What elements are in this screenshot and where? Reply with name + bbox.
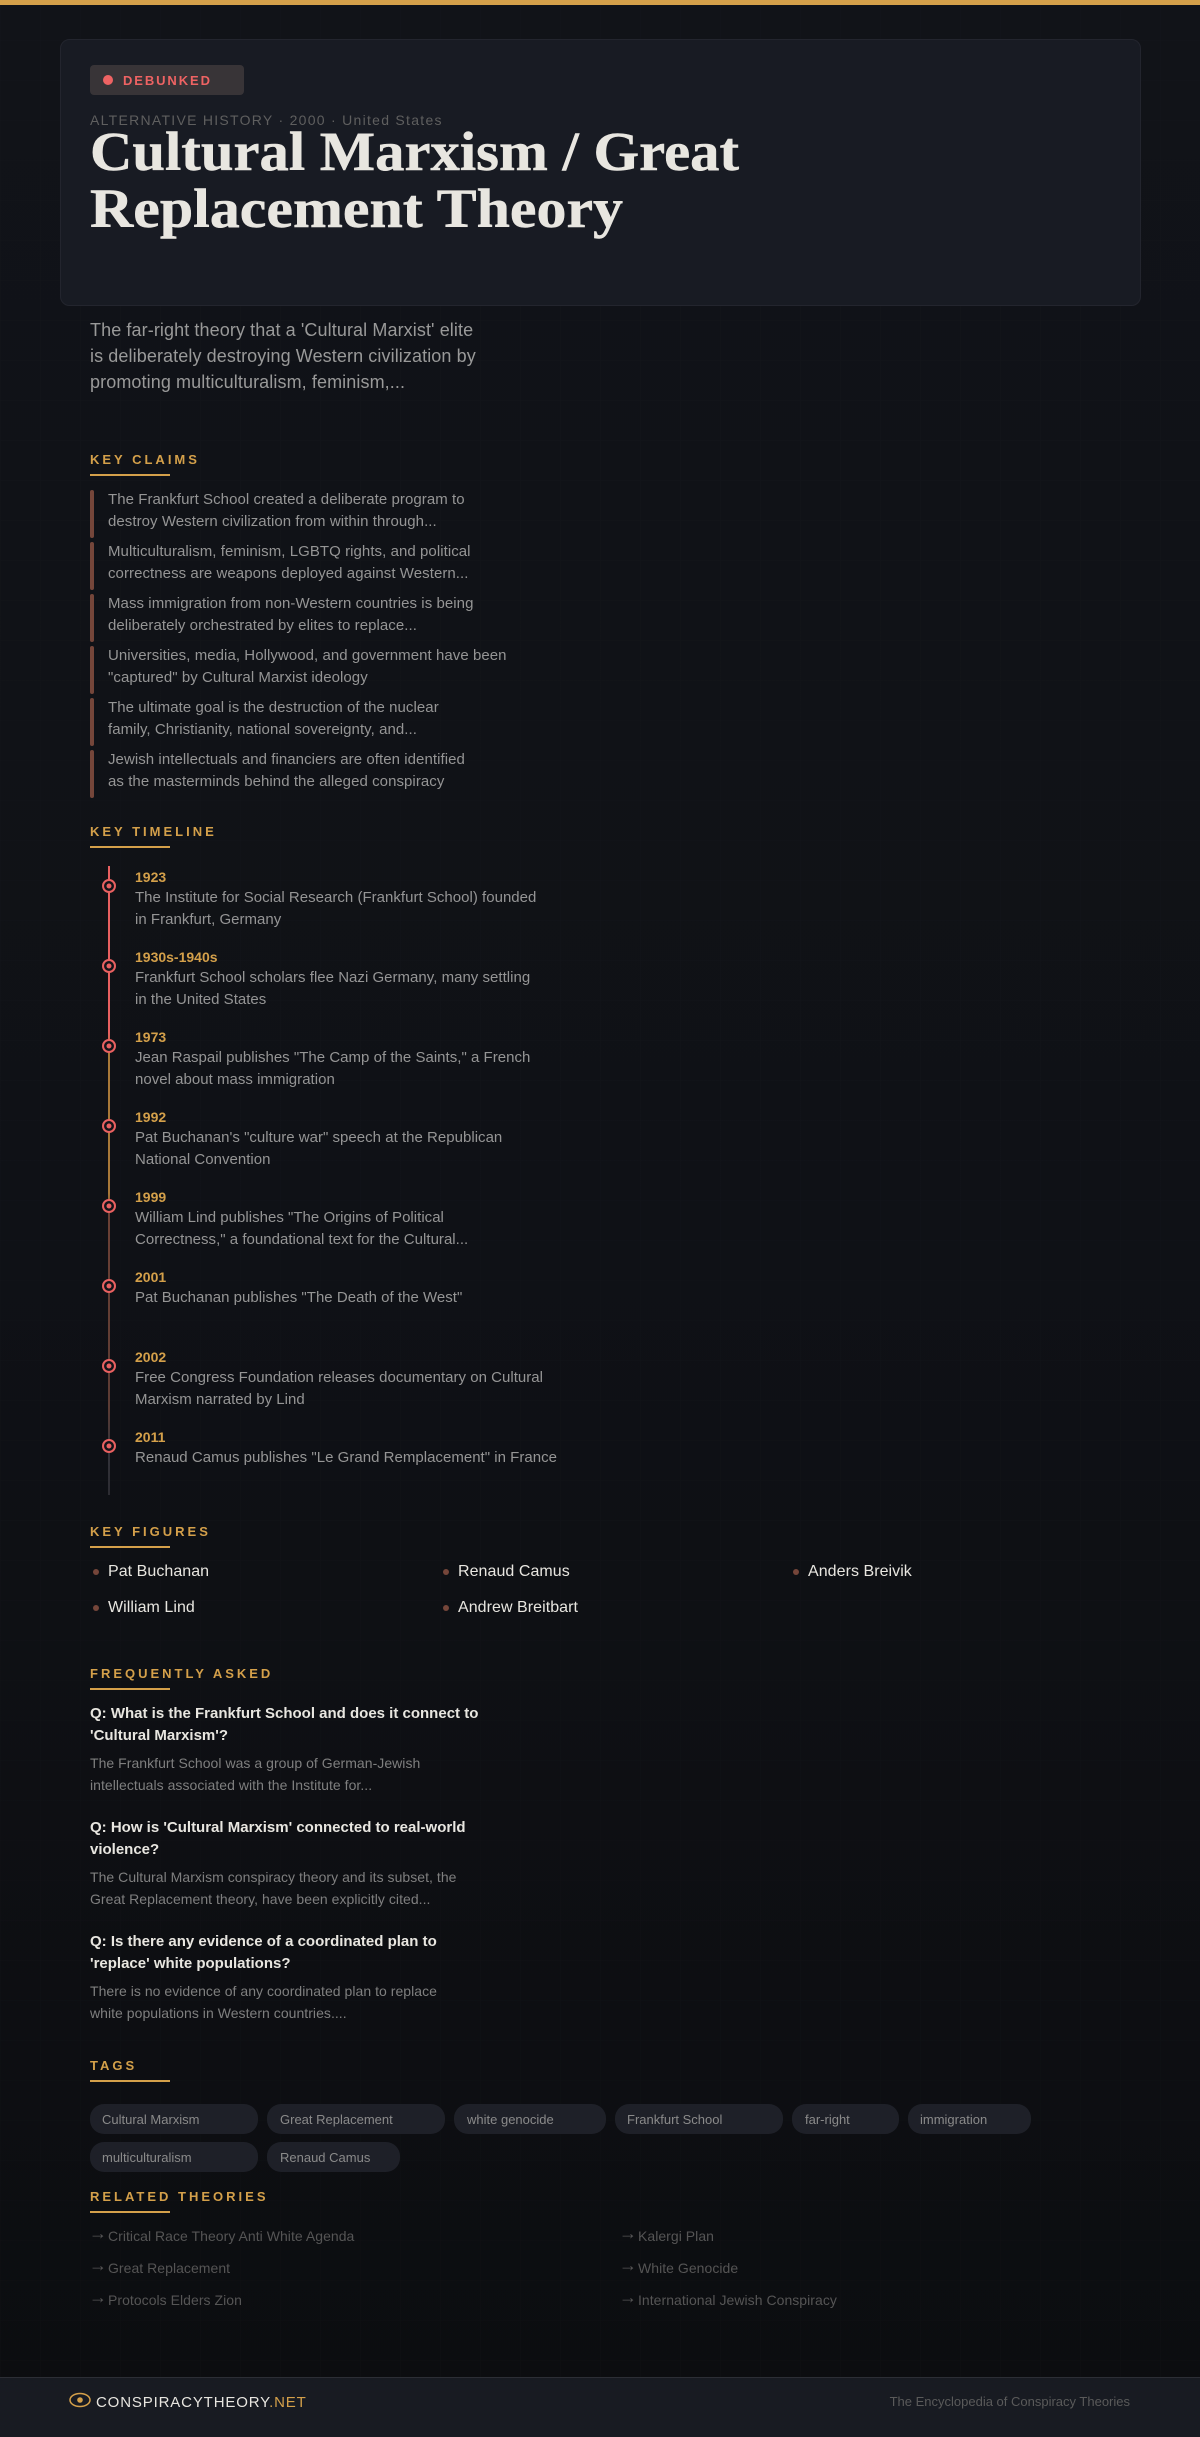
- claim 1: The Frankfurt School created a deliberate program to: [108, 491, 465, 508]
- tag: Great Replacement: Great Replacement: [280, 2112, 393, 2127]
- heading: key timeline: KEY TIMELINE: [90, 824, 217, 839]
- claim 5: [90, 698, 439, 746]
- event 1992: [103, 1109, 502, 1168]
- claim 6: [90, 750, 465, 798]
- link: International Jewish Conspiracy: →: [619, 2287, 642, 2307]
- faq 3: white populations in Western countries....: [89, 2005, 347, 2021]
- heading: key figures: KEY FIGURES: [90, 1524, 211, 1539]
- event 2001: Pat Buchanan publishes "The Death of the West": [135, 1289, 462, 1306]
- faq 2: [90, 1819, 466, 1907]
- event 1992: 1992: [135, 1109, 166, 1125]
- link: Critical Race Theory Anti White Agenda: Critical Race Theory Anti White Agenda: [108, 2228, 355, 2244]
- title: Cultural Marxism / Great: [90, 121, 740, 182]
- event 1973: 1973: [135, 1029, 166, 1045]
- claim 2: correctness are weapons deployed against Western...: [108, 565, 468, 582]
- tag: immigration: [908, 2104, 1031, 2134]
- figure: Andrew Breitbart: Andrew Breitbart: [458, 1599, 578, 1616]
- faq 2: Great Replacement theory, have been explicitly cited...: [90, 1891, 430, 1907]
- event 1999: 1999: [135, 1189, 166, 1205]
- tag: far-right: [792, 2104, 899, 2134]
- faq 1: [90, 1705, 478, 1793]
- event 2002: Marxism narrated by Lind: [135, 1391, 305, 1408]
- event 2002: [103, 1349, 543, 1408]
- faq 1: Q: What is the Frankfurt School and does it connect to: [90, 1705, 478, 1722]
- event 2011: [103, 1429, 557, 1466]
- heading: tags: TAGS: [90, 2058, 137, 2073]
- event 2011: Renaud Camus publishes "Le Grand Remplacement" in France: [135, 1449, 557, 1466]
- faq 3: [89, 1933, 437, 2021]
- tag: Frankfurt School: [615, 2104, 783, 2134]
- claim 3: deliberately orchestrated by elites to replace...: [108, 617, 417, 634]
- timeline axis: [108, 866, 110, 1495]
- event 1930s-1940s: Frankfurt School scholars flee Nazi Germany, many settling: [135, 969, 530, 986]
- heading: key claims: KEY CLAIMS: [90, 452, 200, 467]
- tag: far-right: far-right: [805, 2112, 850, 2127]
- event 2011: 2011: [135, 1429, 166, 1445]
- event 1973: [103, 1029, 530, 1088]
- claim 6: Jewish intellectuals and financiers are often identified: [108, 751, 465, 768]
- event 1930s-1940s: [103, 949, 530, 1008]
- faq 3: Q: Is there any evidence of a coordinated plan to: [90, 1933, 437, 1950]
- tag: Renaud Camus: Renaud Camus: [280, 2150, 371, 2165]
- claim 1: [90, 490, 465, 538]
- tag: multiculturalism: multiculturalism: [102, 2150, 192, 2165]
- figure: Renaud Camus: Renaud Camus: [458, 1563, 570, 1580]
- description: [90, 320, 476, 392]
- event 1923: in Frankfurt, Germany: [135, 911, 282, 928]
- claim 4: [90, 646, 507, 694]
- claim 5: The ultimate goal is the destruction of the nuclear: [108, 699, 439, 716]
- panel: key figures: [90, 1524, 913, 1616]
- description: is deliberately destroying Western civilization by: [90, 346, 476, 366]
- claim 4: Universities, media, Hollywood, and government have been: [108, 647, 507, 664]
- event 1992: Pat Buchanan's "culture war" speech at the Republican: [135, 1129, 502, 1146]
- link: Critical Race Theory Anti White Agenda: →: [89, 2223, 112, 2243]
- wordmark: CONSPIRACYTHEORY.NET: [96, 2394, 307, 2411]
- event 1973: novel about mass immigration: [135, 1071, 335, 1088]
- link: Kalergi Plan: Kalergi Plan: [638, 2228, 714, 2244]
- panel: tags: [90, 2058, 1031, 2172]
- faq 2: violence?: [90, 1841, 159, 1858]
- heading: tags: [90, 2058, 170, 2082]
- faq 2: The Cultural Marxism conspiracy theory and its subset, the: [90, 1869, 457, 1885]
- panel: key timeline: [90, 824, 557, 1495]
- event 2001: [103, 1269, 462, 1306]
- claim 2: [90, 542, 471, 590]
- title: Replacement Theory: [90, 178, 623, 239]
- claim 3: [90, 594, 473, 642]
- status badge: debunked: DEBUNKED: [123, 73, 212, 88]
- event 1923: The Institute for Social Research (Frankfurt School) founded: [135, 889, 536, 906]
- link: Protocols Elders Zion: →: [89, 2287, 112, 2307]
- figure: Pat Buchanan: Pat Buchanan: [108, 1563, 209, 1580]
- faq 3: There is no evidence of any coordinated plan to replace: [90, 1983, 437, 1999]
- claim 6: as the masterminds behind the alleged conspiracy: [108, 773, 445, 790]
- tag: Cultural Marxism: Cultural Marxism: [102, 2112, 200, 2127]
- claim 5: family, Christianity, national sovereignty, and...: [108, 721, 417, 738]
- panel: key claims: [90, 452, 507, 798]
- description: The far-right theory that a 'Cultural Marxist' elite: [90, 320, 473, 340]
- event 1999: Correctness," a foundational text for the Cultural...: [135, 1231, 468, 1248]
- event 1930s-1940s: in the United States: [135, 991, 266, 1008]
- link: White Genocide: →: [619, 2255, 642, 2275]
- claim 4: "captured" by Cultural Marxist ideology: [108, 669, 368, 686]
- faq 1: 'Cultural Marxism'?: [90, 1727, 228, 1744]
- heading: key figures: [90, 1524, 211, 1548]
- heading: key timeline: [90, 824, 217, 848]
- link: Protocols Elders Zion: Protocols Elders Zion: [108, 2292, 242, 2308]
- claim 2: Multiculturalism, feminism, LGBTQ rights, and political: [108, 543, 471, 560]
- event 1999: [103, 1189, 468, 1248]
- tag: Cultural Marxism: [90, 2104, 258, 2134]
- event 2002: 2002: [135, 1349, 166, 1365]
- tag: multiculturalism: [90, 2142, 258, 2172]
- status badge: debunked: [90, 65, 244, 95]
- panel: related theories: [89, 2189, 837, 2308]
- link: Great Replacement: →: [89, 2255, 112, 2275]
- tagline: The Encyclopedia of Conspiracy Theories: [890, 2394, 1130, 2409]
- tag: Renaud Camus: [267, 2142, 400, 2172]
- heading: key claims: [90, 452, 200, 476]
- link: White Genocide: White Genocide: [638, 2260, 738, 2276]
- figure: Anders Breivik: Anders Breivik: [808, 1563, 913, 1580]
- event 2002: Free Congress Foundation releases documentary on Cultural: [135, 1369, 543, 1386]
- faq 3: 'replace' white populations?: [90, 1955, 290, 1972]
- heading: related theories: RELATED THEORIES: [90, 2189, 268, 2204]
- link: International Jewish Conspiracy: International Jewish Conspiracy: [638, 2292, 837, 2308]
- footer: [0, 2377, 1200, 2437]
- tag: white genocide: [454, 2104, 606, 2134]
- header card: [60, 40, 1140, 306]
- figure: William Lind: William Lind: [108, 1599, 195, 1616]
- event 1999: William Lind publishes "The Origins of Political: [135, 1209, 444, 1226]
- event 1973: Jean Raspail publishes "The Camp of the Saints," a French: [135, 1049, 530, 1066]
- link: Great Replacement: Great Replacement: [108, 2260, 230, 2276]
- event 1923: 1923: [135, 869, 166, 885]
- category meta line: ALTERNATIVE HISTORY · 2000 · United States: [90, 112, 443, 128]
- event 1930s-1940s: 1930s-1940s: [135, 949, 218, 965]
- event 1992: National Convention: [135, 1151, 270, 1168]
- event 1923: [103, 869, 536, 928]
- icon: eye logo: [70, 2394, 90, 2406]
- heading: frequently asked: FREQUENTLY ASKED: [90, 1666, 273, 1681]
- tag: immigration: immigration: [920, 2112, 987, 2127]
- link: Kalergi Plan: →: [619, 2223, 642, 2243]
- faq 1: The Frankfurt School was a group of German-Jewish: [90, 1755, 420, 1771]
- tag: Frankfurt School: Frankfurt School: [627, 2112, 722, 2127]
- claim 1: destroy Western civilization from within through...: [108, 513, 437, 530]
- description: promoting multiculturalism, feminism,...: [90, 372, 405, 392]
- faq 2: Q: How is 'Cultural Marxism' connected to real-world: [90, 1819, 466, 1836]
- title: [90, 121, 740, 239]
- event 2001: 2001: [135, 1269, 166, 1285]
- tag: white genocide: white genocide: [466, 2112, 554, 2127]
- panel: frequently asked: [89, 1666, 478, 2021]
- tag: Great Replacement: [267, 2104, 445, 2134]
- faq 1: intellectuals associated with the Institute for...: [90, 1777, 372, 1793]
- claim 3: Mass immigration from non-Western countries is being: [108, 595, 473, 612]
